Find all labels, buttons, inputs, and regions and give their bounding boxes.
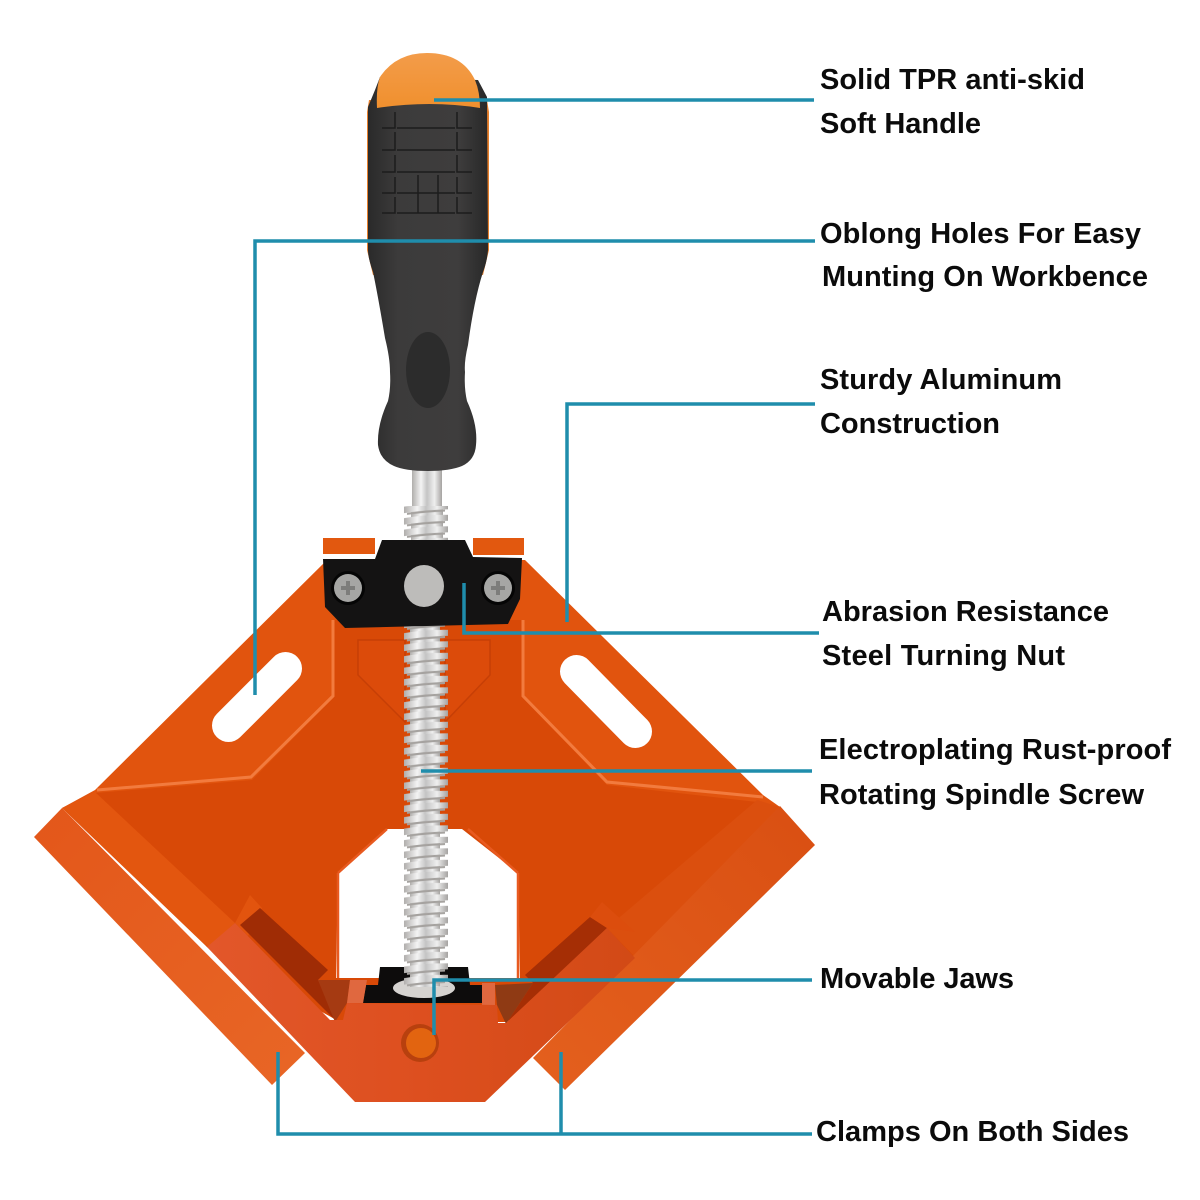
right jaw fin shadow xyxy=(506,917,607,1024)
panel: corner clamp product illustration xyxy=(34,53,815,1102)
jaw face xyxy=(207,923,635,1102)
nut centre pin xyxy=(404,565,444,607)
handle thumb recess xyxy=(406,332,450,408)
left rail outer face xyxy=(34,808,305,1085)
spindle screw thread xyxy=(403,625,448,987)
label: spindle screw xyxy=(819,734,1171,811)
lower plate face xyxy=(95,620,757,1022)
washer xyxy=(393,978,455,998)
label: oblong holes: Munting On Workbence xyxy=(822,261,1148,293)
right rail outer face xyxy=(533,806,815,1090)
nut block orange frame xyxy=(347,980,495,1005)
label: oblong holes: Oblong Holes For Easy xyxy=(820,218,1141,250)
steel turning nut xyxy=(323,540,522,628)
label: movable jaws: Movable Jaws xyxy=(820,963,1014,995)
left orange top block xyxy=(323,538,375,554)
handle orange side slivers xyxy=(367,100,489,275)
label: spindle screw: Rotating Spindle Screw xyxy=(819,779,1144,811)
spindle upper spring core xyxy=(411,506,443,542)
label: soft handle: Soft Handle xyxy=(820,108,981,140)
label: clamps on both sides: Clamps On Both Sides xyxy=(816,1116,1129,1148)
rear notch detail xyxy=(358,640,490,722)
line: oblong holes xyxy=(255,241,815,695)
right rail inner strip xyxy=(607,800,780,957)
label: aluminum construction: Sturdy Aluminum xyxy=(820,364,1062,396)
handle orange dome xyxy=(377,53,480,108)
left jaw fin orange xyxy=(235,895,262,936)
label: aluminum construction: Construction xyxy=(820,408,1000,440)
spindle upper shaft xyxy=(412,468,442,510)
line: aluminum construction xyxy=(567,404,815,622)
line: spindle screw xyxy=(421,769,812,773)
right jaw fin orange xyxy=(590,902,635,932)
line: soft handle xyxy=(434,98,814,102)
handle black grip xyxy=(368,77,488,471)
left bracket of nut block xyxy=(318,980,350,1022)
raised plate edge highlights xyxy=(97,620,763,797)
label: spindle screw: Electroplating Rust-proof xyxy=(819,734,1171,766)
callout lines xyxy=(255,100,819,1134)
label: turning nut: Steel Turning Nut xyxy=(822,640,1065,672)
right oblong hole xyxy=(576,672,636,732)
left jaw fin shadow xyxy=(240,908,337,1022)
nut block black insert xyxy=(363,967,482,1003)
central window xyxy=(336,829,520,978)
label: soft handle: Solid TPR anti-skid xyxy=(820,64,1085,96)
spindle upper thread xyxy=(403,506,448,540)
window edge xyxy=(338,829,518,978)
left nut screw xyxy=(331,571,365,605)
label: turning nut: Abrasion Resistance xyxy=(822,596,1109,628)
spindle screw core xyxy=(410,625,440,987)
line: clamps on both sides xyxy=(278,1052,812,1134)
right bracket of nut block xyxy=(495,983,533,1024)
left oblong hole xyxy=(228,668,286,726)
line: turning nut xyxy=(464,583,819,633)
line: movable jaws xyxy=(434,980,812,1035)
jaw pin hole xyxy=(401,1024,439,1062)
label: oblong holes xyxy=(820,218,1148,293)
jaw pin xyxy=(406,1028,436,1058)
right nut screw xyxy=(481,571,515,605)
label: turning nut xyxy=(822,596,1109,672)
handle grip texture xyxy=(382,112,472,213)
right orange top block xyxy=(473,538,524,555)
left rail inner strip xyxy=(62,792,235,947)
label: soft handle xyxy=(820,64,1085,140)
label: aluminum construction xyxy=(820,364,1062,440)
main back plate xyxy=(62,560,780,1022)
